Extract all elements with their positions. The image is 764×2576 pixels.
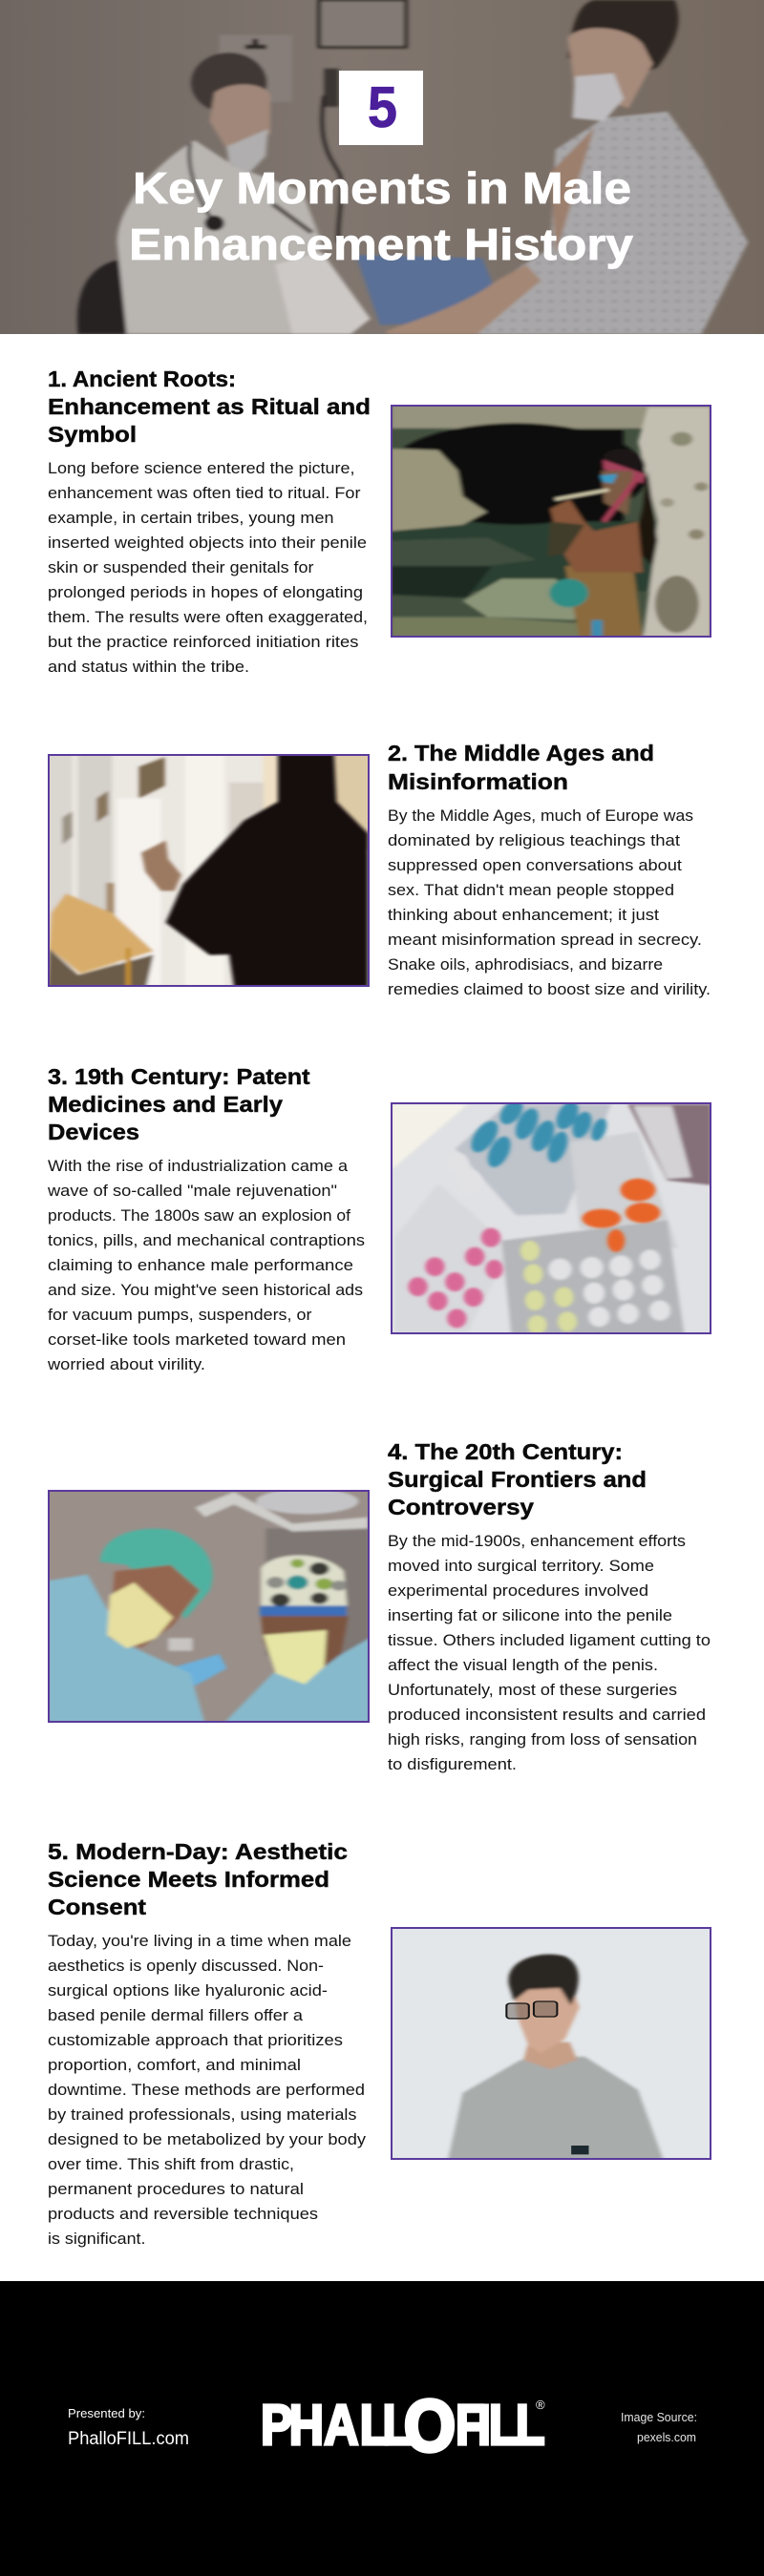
body text 4: tissue. Others included ligament cutting to [388, 1632, 711, 1649]
body text 3 [47, 1158, 365, 1373]
body text 5: products and reversible techniques [48, 2206, 318, 2223]
presented by [68, 2406, 189, 2449]
body text 3: and size. You might've seen historical ads [48, 1282, 363, 1299]
body text 2: thinking about enhancement; it just [388, 907, 659, 924]
body text 5: surgical options like hyaluronic acid- [48, 1982, 328, 2000]
number badge [339, 71, 423, 145]
heading 3: Medicines and Early [48, 1092, 283, 1117]
heading 1 [48, 367, 371, 447]
body text 3: wave of so-called "male rejuvenation" [47, 1183, 337, 1200]
number badge: 5 [368, 75, 397, 139]
image source [621, 2411, 697, 2444]
title: Enhancement History [129, 220, 633, 269]
heading 5: 5. Modern-Day: Aesthetic [48, 1839, 348, 1864]
footer [0, 2281, 764, 2576]
photo: clergyman at a lectern [48, 754, 370, 987]
body text 5: customizable approach that prioritizes [48, 2032, 343, 2049]
body text 1: example, in certain tribes, young men [48, 510, 334, 527]
photo: man with glasses in grey sweater [391, 1927, 711, 2160]
body text 3: for vacuum pumps, suspenders, or [48, 1307, 312, 1324]
body text 5 [48, 1933, 367, 2248]
body text 2 [388, 807, 711, 998]
heading 2 [388, 741, 654, 794]
body text 3: With the rise of industrialization came a [48, 1158, 349, 1175]
heading 3: 3. 19th Century: Patent [48, 1064, 310, 1089]
title [129, 163, 633, 269]
body text 2: meant misinformation spread in secrecy. [388, 932, 702, 949]
photo: blister packs of pills [391, 1099, 711, 1334]
presented by: Presented by: [68, 2406, 145, 2420]
body text 5: aesthetics is openly discussed. Non- [48, 1958, 324, 1975]
body text 2: remedies claimed to boost size and virility. [388, 981, 711, 998]
body text 4: to disfigurement. [388, 1756, 517, 1773]
logo: PHALL [261, 2393, 412, 2457]
body text 5: based penile dermal fillers offer a [48, 2007, 304, 2024]
heading 2: 2. The Middle Ages and [388, 741, 654, 765]
header banner [0, 0, 764, 334]
heading 4: 4. The 20th Century: [388, 1439, 623, 1464]
body text 3: claiming to enhance male performance [48, 1257, 353, 1274]
body text 2: suppressed open conversations about [388, 857, 682, 874]
logo: FILL [456, 2393, 545, 2457]
section 2: middle ages [48, 741, 711, 998]
body text 5: proportion, comfort, and minimal [48, 2057, 301, 2074]
body text 1: Long before science entered the picture, [48, 460, 355, 477]
heading 1: Enhancement as Ritual and [48, 394, 371, 419]
body text 1: but the practice reinforced initiation rites [48, 634, 359, 651]
section 5: modern day [48, 1839, 711, 2248]
body text 2: sex. That didn't mean people stopped [388, 882, 674, 899]
body text 5: downtime. These methods are performed [48, 2082, 365, 2099]
heading 4 [388, 1439, 647, 1519]
heading 5: Science Meets Informed [48, 1867, 329, 1892]
body text 5: by trained professionals, using materials [48, 2106, 357, 2124]
body text 4: produced inconsistent results and carried [388, 1707, 706, 1724]
heading 5 [48, 1839, 348, 1919]
photo: two surgeons [48, 1489, 370, 1723]
body text 3: tonics, pills, and mechanical contraptions [48, 1232, 365, 1249]
body text 3: worried about virility. [47, 1356, 205, 1373]
body text 5: is significant. [48, 2230, 145, 2248]
section 1: ancient roots [48, 367, 711, 676]
body text 4: Unfortunately, most of these surgeries [388, 1682, 677, 1699]
body text 5: designed to be metabolized by your body [48, 2131, 367, 2148]
section 3: 19th century [47, 1064, 711, 1373]
body text 5: Today, you're living in a time when male [48, 1933, 351, 1950]
body text 4: experimental procedures involved [388, 1582, 648, 1600]
logo: ® [536, 2398, 545, 2412]
header photo: doctor and patient [0, 0, 764, 334]
body text 2: Snake oils, aphrodisiacs, and bizarre [388, 956, 663, 974]
body text 3: corset-like tools marketed toward men [48, 1331, 346, 1349]
section 4: 20th century [48, 1439, 711, 1773]
heading 1: Symbol [48, 422, 137, 447]
body text 2: By the Middle Ages, much of Europe was [388, 807, 693, 825]
image source: Image Source: [621, 2411, 697, 2424]
body text 1: prolonged periods in hopes of elongating [48, 584, 363, 601]
body text 1 [48, 460, 368, 676]
body text 4: affect the visual length of the penis. [388, 1657, 658, 1674]
heading 4: Surgical Frontiers and [388, 1467, 647, 1492]
logo: O [404, 2386, 456, 2467]
title: Key Moments in Male [133, 163, 631, 213]
body text 1: enhancement was often tied to ritual. For [48, 485, 361, 502]
body text 3: products. The 1800s saw an explosion of [48, 1207, 350, 1225]
body text 1: inserted weighted objects into their penile [48, 534, 367, 552]
photo: tribal man playing flute by a cave [385, 405, 711, 638]
heading 3 [48, 1064, 310, 1144]
image source: pexels.com [637, 2431, 696, 2444]
heading 2: Misinformation [388, 769, 568, 794]
heading 3: Devices [48, 1120, 139, 1144]
heading 1: 1. Ancient Roots: [48, 367, 236, 391]
presented by: PhalloFILL.com [68, 2429, 189, 2449]
body text 4: high risks, ranging from loss of sensation [388, 1731, 697, 1749]
body text 2: dominated by religious teachings that [388, 832, 680, 849]
heading 4: Controversy [388, 1495, 534, 1519]
body text 5: permanent procedures to natural [48, 2181, 304, 2198]
body text 4 [388, 1533, 711, 1773]
body text 1: skin or suspended their genitals for [48, 559, 314, 576]
logo [261, 2386, 545, 2467]
body text 1: them. The results were often exaggerated, [48, 609, 368, 626]
body text 5: over time. This shift from drastic, [48, 2156, 294, 2173]
body text 4: inserting fat or silicone into the penile [388, 1607, 672, 1624]
heading 5: Consent [48, 1895, 146, 1919]
body text 4: By the mid-1900s, enhancement efforts [388, 1533, 686, 1550]
body text 1: and status within the tribe. [48, 659, 249, 676]
body text 4: moved into surgical territory. Some [388, 1558, 654, 1575]
